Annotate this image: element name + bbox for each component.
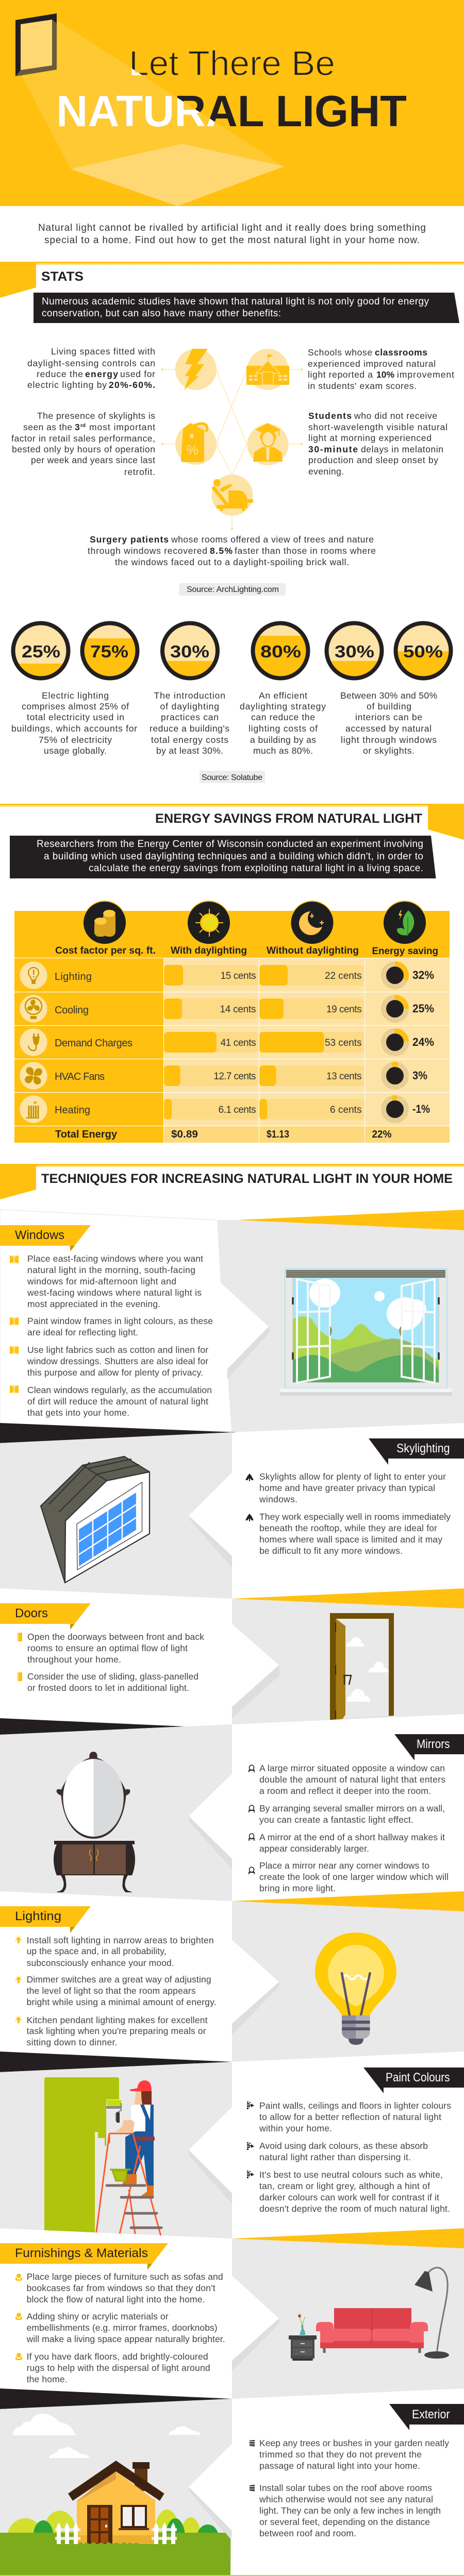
stat: skylights: per week and years since last <box>31 455 155 465</box>
list: doors tips: Open the doorways between front and back <box>27 1632 204 1642</box>
list: skylighting tips: windows. <box>259 1494 297 1504</box>
gauge caption: efficient strategy: An efficient <box>259 690 307 701</box>
gauge caption: daylighting practices: practices can <box>161 712 219 722</box>
stats intro box: conservation, but can also have many other benefits: <box>42 308 281 319</box>
heading: mirrors <box>394 1734 464 1760</box>
row: hvac fans: 12.7 cents <box>213 1071 256 1082</box>
energy intro box <box>10 836 436 878</box>
gauge caption: electric lighting: usage globally. <box>44 745 107 756</box>
gauge caption: electric lighting <box>11 690 137 756</box>
table header: Cost factor per sq. ft. <box>55 945 156 956</box>
row: cooling: 25% <box>412 1002 434 1015</box>
list: windows tips: this purpose and allow for plenty of privacy. <box>27 1367 203 1378</box>
intro text: Natural light cannot be rivalled by artificial light and it really does bring something <box>38 223 426 233</box>
list: doors tips: rooms to ensure an optimal flow of light <box>27 1643 188 1653</box>
stat: students: short-wavelength visible natural <box>308 422 448 432</box>
heading: mirrors: Mirrors <box>417 1737 450 1751</box>
gauge caption: efficient strategy: daylighting strategy <box>240 701 326 711</box>
stat: students <box>308 411 448 477</box>
icon: moon <box>291 901 334 944</box>
row: hvac fans: 3% <box>412 1069 427 1082</box>
row: total energy: Total Energy <box>55 1129 118 1140</box>
stat: skylights: 3 <box>75 422 80 432</box>
icon: coins <box>83 901 126 944</box>
section heading: energy savings: ENERGY SAVINGS FROM NATURAL LIGHT <box>155 811 422 826</box>
gauge 30% second <box>327 623 382 678</box>
list: paint tips: natural light rather than dispersing it. <box>259 2152 411 2162</box>
section heading: energy savings <box>0 804 464 840</box>
gauge caption: building interiors: interiors can be <box>355 712 422 722</box>
stat: classrooms: 10% <box>376 369 394 380</box>
gauge 25%: 25% <box>22 642 60 661</box>
list: doors tips: or frosted doors to let in additional light. <box>27 1683 189 1693</box>
stat: skylights: retrofit. <box>124 467 155 477</box>
gauge caption: efficient strategy: much as 80%. <box>253 745 313 756</box>
row: demand charges: Demand Charges <box>55 1038 132 1049</box>
list: mirrors tips: you can create a fantastic light effect. <box>259 1815 413 1825</box>
stat: surgery: 8.5% <box>210 546 233 556</box>
row: heating: 6 cents <box>330 1105 362 1115</box>
row: cooling: Cooling <box>55 1005 89 1016</box>
heading: windows <box>0 1225 91 1251</box>
gauge 25% <box>13 623 68 678</box>
energy table <box>14 901 450 1143</box>
stat: students: 30-minute <box>308 444 358 454</box>
list: skylighting tips: beneath the rooftop, while they are ideal for <box>259 1523 437 1533</box>
illustration: open window <box>280 1269 452 1396</box>
gauge caption: building interiors: or skylights. <box>363 745 415 756</box>
gauge 30%: 30% <box>170 642 209 661</box>
stat: energy <box>27 346 155 390</box>
stat: students: who did not receive <box>354 411 437 421</box>
heading: furnishings and materials <box>0 2243 168 2270</box>
list: windows tips: of dirt will reduce the amount of natural light <box>27 1396 208 1406</box>
gauge caption: electric lighting: total electricity used in <box>27 712 124 722</box>
heading: windows: Windows <box>15 1228 64 1242</box>
percent gauges <box>13 623 451 680</box>
stat: skylights: most important <box>89 422 155 432</box>
stat: energy: used for <box>120 369 155 379</box>
energy intro box: Researchers from the Energy Center of Wisconsin conducted an experiment involving <box>37 839 423 850</box>
list: mirrors tips: By arranging several smaller mirrors on a wall, <box>259 1803 445 1814</box>
illustration: painter on ladder <box>44 2077 161 2236</box>
heading: paint colours: Paint Colours <box>386 2071 450 2084</box>
list: paint tips: to allow for a better reflection of natural light <box>259 2112 441 2122</box>
stat: energy: Living spaces fitted with <box>51 346 155 357</box>
list: furnishings tips: rugs to help with the dispersal of light around <box>27 2363 210 2373</box>
gauge caption: daylighting practices: The introduction <box>154 690 225 701</box>
row: demand charges <box>20 1028 434 1056</box>
stat: students: delays in melatonin <box>361 444 443 454</box>
row: cooling: 14 cents <box>220 1004 256 1015</box>
row: hvac fans: HVAC Fans <box>55 1071 105 1082</box>
gauge caption: electric lighting: comprises almost 25% of <box>22 701 129 711</box>
row: demand charges: 53 cents <box>325 1038 362 1048</box>
table header <box>14 911 450 958</box>
list: exterior tips: Keep any trees or bushes in your garden neatly <box>259 2438 449 2448</box>
heading: skylighting <box>369 1438 464 1465</box>
list: mirrors tips: bring in more light. <box>259 1883 336 1893</box>
stats intro box: Numerous academic studies have shown that natural light is not only good for energy <box>42 296 429 307</box>
list: mirrors tips: appear considerably larger. <box>259 1843 369 1854</box>
stat: surgery: the windows faced out to a daylight-spoiling brick wall. <box>115 557 349 567</box>
stat: surgery: whose rooms offered a view of trees and nature <box>171 534 374 545</box>
row: heating: -1% <box>412 1103 430 1115</box>
stat: classrooms: experienced improved natural <box>308 359 436 369</box>
list: exterior tips <box>250 2438 449 2538</box>
list: skylighting tips: homes where wall space is limited and it may <box>259 1534 442 1545</box>
row: lighting: 32% <box>412 969 434 981</box>
list: skylighting tips: be difficult to fit any more windows. <box>259 1546 403 1556</box>
stats intro box <box>34 293 459 323</box>
list: furnishings tips: will make a living space appear naturally brighter. <box>26 2334 225 2344</box>
list: windows tips: Paint window frames in light colours, as these <box>27 1316 213 1326</box>
list: exterior tips: trimmed so that they do not prevent the <box>259 2449 422 2460</box>
list: mirrors tips: a room and reflect it deeper into the room. <box>259 1786 431 1796</box>
list: doors tips: throughout your home. <box>27 1654 121 1665</box>
illustration: light bulb <box>315 1933 396 2045</box>
row: demand charges: 24% <box>412 1036 434 1048</box>
gauge caption: efficient strategy: a building by as <box>250 735 316 745</box>
row: total energy <box>55 1129 392 1140</box>
floor light patch <box>71 144 284 206</box>
stat: energy: 20%-60%. <box>109 380 155 390</box>
source: Solatube: Source: Solatube <box>202 773 262 782</box>
heading: paint colours <box>363 2067 464 2093</box>
heading: doors: Doors <box>15 1606 48 1620</box>
gauge 75% <box>82 623 137 679</box>
list: furnishings tips: the home. <box>27 2374 68 2384</box>
gauge caption: building interiors <box>340 690 437 756</box>
list: furnishings tips: Place large pieces of furniture such as sofas and <box>27 2272 223 2282</box>
row: cooling <box>20 995 434 1023</box>
list: exterior tips: or several feet, depending on the distance <box>259 2517 430 2527</box>
gauge 50% <box>396 623 451 679</box>
list: paint tips <box>247 2100 451 2214</box>
list: skylighting tips: home and have greater privacy than typical <box>259 1483 435 1493</box>
stat: surgery: faster than those in rooms where <box>235 546 376 556</box>
stat: classrooms: classrooms <box>375 347 427 358</box>
icon: lightning <box>175 349 217 390</box>
list: windows tips: are ideal for reflecting light. <box>27 1327 138 1337</box>
list: skylighting tips: They work especially well in rooms immediately <box>259 1512 451 1522</box>
section heading: techniques: TECHNIQUES FOR INCREASING NATURAL LIGHT IN YOUR HOME <box>41 1172 453 1186</box>
gauge caption: electric lighting: 75% of electricity <box>39 735 112 745</box>
header banner: Let There Be <box>129 44 335 83</box>
list: doors tips: Consider the use of sliding, glass-panelled <box>27 1671 198 1682</box>
list: windows tips <box>10 1253 213 1418</box>
stat: classrooms: Schools whose <box>308 347 372 358</box>
heading: exterior: Exterior <box>412 2408 450 2421</box>
heading: lighting: Lighting <box>15 1909 61 1923</box>
list: furnishings tips: bookcases far from windows so that they don't <box>27 2283 216 2293</box>
title: Let There Be: Let There Be <box>129 44 335 83</box>
row: total energy: $0.89 <box>171 1129 198 1140</box>
zig-zag background panels <box>0 1210 464 2575</box>
stat: skylights: The presence of skylights is <box>37 411 155 421</box>
row: total energy: $1.13 <box>267 1129 289 1140</box>
source: ArchLighting <box>179 583 286 596</box>
heading: lighting <box>0 1906 91 1933</box>
gauge caption: building interiors: accessed by natural <box>345 723 432 734</box>
stat: skylights: seen as the <box>23 422 72 432</box>
row: heating: 6.1 cents <box>219 1105 256 1115</box>
list: mirrors tips <box>248 1763 449 1893</box>
gauge caption: building interiors: Between 30% and 50% <box>340 690 437 701</box>
gauge caption: electric lighting: buildings, which accounts for <box>11 723 137 734</box>
gauge caption: electric lighting: Electric lighting <box>42 690 109 701</box>
section heading: techniques <box>0 1164 464 1199</box>
table header: With daylighting <box>171 945 247 956</box>
stat: students: light at morning experienced <box>308 433 432 443</box>
gauge caption: efficient strategy: lighting costs of <box>248 723 318 734</box>
icon: school <box>246 349 289 390</box>
stats connector lines <box>161 368 303 530</box>
icon: sun <box>187 901 230 944</box>
icon: price tag <box>175 423 217 465</box>
row: heating <box>20 1095 430 1123</box>
gauge caption: efficient strategy: can reduce the <box>251 712 315 722</box>
row: demand charges: 41 cents <box>221 1038 256 1048</box>
stat: energy: electric lighting by <box>27 380 107 390</box>
gauge caption: building interiors: of building <box>367 701 411 711</box>
list: windows tips: Clean windows regularly, as the accumulation <box>27 1385 212 1395</box>
gauge 30% <box>162 623 218 679</box>
icon: leaf <box>383 901 426 944</box>
illustration: house and garden <box>0 2414 230 2575</box>
list: furnishings tips: embellishments (e.g. mirror frames, doorknobs) <box>27 2323 218 2333</box>
list: exterior tips: which otherwise would not see any natural <box>259 2494 433 2504</box>
list: paint tips: doesn't deprive the room of much natural light. <box>259 2204 450 2214</box>
stat: students: Students <box>308 411 352 421</box>
list: furnishings tips <box>15 2272 225 2384</box>
gauge caption: daylighting practices: reduce a building's <box>150 723 229 734</box>
heading: exterior <box>389 2404 464 2430</box>
heading: doors <box>0 1603 91 1630</box>
stat: classrooms <box>308 347 454 391</box>
row: cooling: 19 cents <box>326 1004 362 1015</box>
gauge caption: daylighting practices <box>150 690 229 756</box>
heading: skylighting: Skylighting <box>396 1442 450 1455</box>
heading: furnishings and materials: Furnishings & Materials <box>15 2246 148 2260</box>
row: lighting: 15 cents <box>221 971 256 981</box>
stat: skylights: factor in retail sales performance, <box>11 433 155 444</box>
list: lighting tips: sitting down to dinner. <box>27 2037 118 2047</box>
list: windows tips: window dressings. Shutters are also ideal for <box>27 1356 208 1366</box>
row: lighting: 22 cents <box>325 971 362 981</box>
stat: skylights: rd <box>80 423 86 429</box>
row: heating: Heating <box>55 1105 90 1116</box>
gauge 80% <box>253 623 308 680</box>
row: hvac fans: 13 cents <box>326 1071 362 1082</box>
source: Solatube <box>200 771 265 783</box>
list: skylighting tips <box>245 1471 451 1556</box>
list: lighting tips: task lighting when you're preparing meals or <box>27 2026 206 2036</box>
stat: surgery: Surgery patients <box>90 534 169 545</box>
header banner <box>0 0 464 206</box>
list: windows tips: that gets into your home. <box>27 1408 129 1418</box>
list: lighting tips: subconsciously enhance your mood. <box>27 1958 174 1968</box>
icon: hospital bed <box>211 474 253 516</box>
illustration: mirror and cabinet <box>54 1752 135 1892</box>
light beam <box>22 20 284 169</box>
stat: skylights <box>11 411 155 477</box>
illustration: skylight <box>41 1456 150 1583</box>
stat: classrooms: improvement <box>397 369 454 380</box>
illustration: sofa and lamp <box>289 2267 449 2361</box>
list: exterior tips: between roof and room. <box>259 2528 356 2538</box>
stat: skylights: bested only by hours of operation <box>12 444 155 454</box>
icon: window <box>15 13 57 76</box>
list: mirrors tips: Place a mirror near any corner windows to <box>259 1860 429 1871</box>
energy intro box: calculate the energy savings from exploiting natural light in a living space. <box>89 863 423 874</box>
stat: energy: reduce the <box>37 369 83 379</box>
header banner: NATURAL LIGHT <box>56 87 407 136</box>
stat: energy: energy <box>85 369 118 379</box>
gauge caption: daylighting practices: total energy costs <box>151 735 228 745</box>
stat: surgery <box>88 534 376 567</box>
list: doors tips <box>17 1632 204 1693</box>
list: lighting tips: Install soft lighting in narrow areas to brighten <box>27 1935 214 1945</box>
icon: graduate <box>247 423 289 465</box>
list: windows tips: windows for mid-afternoon light and <box>27 1276 176 1286</box>
stat: students: production and sleep onset by <box>308 455 438 465</box>
icon: price tag: % <box>186 442 198 457</box>
list: mirrors tips: double the amount of natural light that enters <box>259 1774 445 1785</box>
list: skylighting tips: Skylights allow for plenty of light to enter your <box>259 1471 446 1482</box>
gauge caption: daylighting practices: by at least 30%. <box>156 745 223 756</box>
list: furnishings tips: block the flow of natural light into the home. <box>27 2294 205 2304</box>
gauge 30% second: 30% <box>335 642 374 661</box>
list: exterior tips: passage of natural light into your home. <box>259 2461 420 2471</box>
list: windows tips: west-facing windows where natural light is <box>27 1287 202 1298</box>
list: mirrors tips: create the look of one larger window which will <box>259 1872 449 1882</box>
list: furnishings tips: Adding shiny or acrylic materials or <box>27 2311 169 2321</box>
list: paint tips: Avoid using dark colours, as these absorb <box>259 2141 428 2151</box>
section heading: stats: STATS <box>41 269 84 284</box>
list: paint tips: Paint walls, ceilings and floors in lighter colours <box>259 2100 451 2111</box>
list: paint tips: within your home. <box>259 2123 332 2133</box>
list: windows tips: most appreciated in the evening. <box>27 1299 160 1309</box>
section heading: quotes <box>0 2575 464 2576</box>
list: furnishings tips: If you have dark floors, add brightly-coloured <box>27 2351 208 2362</box>
gauge caption: building interiors: light through windows <box>341 735 437 745</box>
list: lighting tips <box>15 1935 217 2047</box>
intro text <box>38 223 426 246</box>
stat: energy: daylight-sensing controls can <box>27 358 155 368</box>
source: ArchLighting: Source: ArchLighting.com <box>187 585 279 594</box>
list: lighting tips: the level of light so that the room appears <box>27 1986 196 1996</box>
list: mirrors tips: A large mirror situated opposite a window can <box>259 1763 445 1773</box>
gauge caption: daylighting practices: of daylighting <box>160 701 219 711</box>
list: windows tips: Place east-facing windows where you want <box>27 1253 203 1264</box>
row: lighting <box>20 961 434 989</box>
list: paint tips: tan, cream or light grey, although a hint of <box>259 2181 430 2191</box>
table header: Without daylighting <box>267 945 359 956</box>
gauge 50%: 50% <box>403 642 443 661</box>
table header: Energy saving <box>372 946 438 957</box>
stat: classrooms: light reported a <box>308 369 373 380</box>
list: windows tips: Use light fabrics such as cotton and linen for <box>27 1345 208 1355</box>
row: lighting: Lighting <box>55 971 92 982</box>
stat: surgery: through windows recovered <box>88 546 207 556</box>
section heading: stats <box>0 262 464 298</box>
row: hvac fans <box>20 1061 427 1090</box>
table body background <box>14 958 450 1143</box>
energy intro box: a building which used daylighting techniques and a building which didn't, in order to <box>44 851 423 862</box>
list: lighting tips: Kitchen pendant lighting makes for excellent <box>27 2015 208 2025</box>
gauge 75%: 75% <box>90 642 128 661</box>
row: total energy: 22% <box>372 1129 392 1140</box>
list: lighting tips: Dimmer switches are a great way of adjusting <box>27 1974 211 1985</box>
gauge caption: efficient strategy <box>240 690 326 756</box>
illustration: door <box>330 1613 394 1722</box>
list: paint tips: It's best to use neutral colours such as white, <box>259 2170 443 2180</box>
gauge 80%: 80% <box>260 642 301 661</box>
list: exterior tips: Install solar tubes on the roof above rooms <box>259 2483 432 2493</box>
list: exterior tips: light. They can be only a few inches in length <box>259 2505 441 2516</box>
list: windows tips: natural light in the morning, south-facing <box>27 1265 195 1275</box>
stat: classrooms: in students' exam scores. <box>308 381 417 391</box>
list: lighting tips: up the space and, in all probability, <box>27 1946 167 1956</box>
list: mirrors tips: A mirror at the end of a short hallway makes it <box>259 1832 445 1842</box>
intro text: special to a home. Find out how to get the most natural light in your home now. <box>44 235 420 246</box>
list: paint tips: darker colours can work well for contrast if it <box>259 2192 439 2202</box>
title: Natural Light: NATURAL LIGHT <box>56 87 407 136</box>
stat: students: evening. <box>308 466 344 477</box>
list: lighting tips: bright while using a minimal amount of energy. <box>27 1997 217 2007</box>
